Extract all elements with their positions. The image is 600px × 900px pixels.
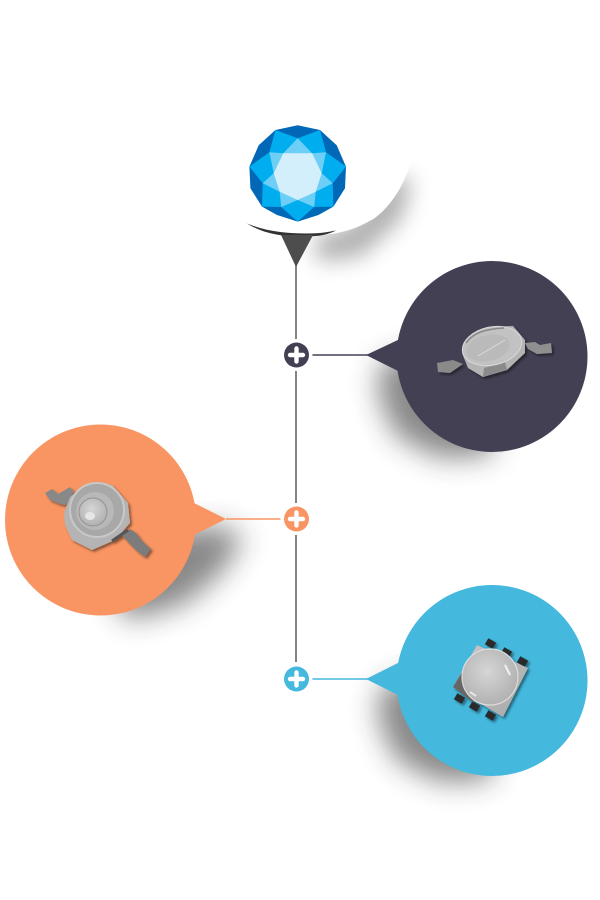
icon: blue gem [249, 125, 346, 222]
panel: orange callout [5, 424, 226, 616]
icon: plus, blue [280, 663, 312, 695]
panel: top white badge [247, 100, 414, 267]
icon: high power LED, dark panel [437, 321, 552, 377]
shadows [110, 175, 500, 782]
pointer: dark callout [366, 339, 400, 372]
pointer: blue callout [366, 662, 400, 696]
panel: dark callout [366, 261, 588, 452]
panel: blue callout [366, 585, 588, 776]
connector: blue [306, 678, 368, 680]
pointer: orange callout [192, 502, 226, 536]
icon: plus, orange [280, 503, 312, 535]
icon: high power LED, orange panel [45, 483, 151, 557]
connector: dark [306, 354, 368, 356]
pointer: top badge [281, 235, 313, 267]
icon: surface mount LED, blue panel [453, 638, 528, 721]
connector: orange [226, 518, 286, 520]
timeline spine [295, 262, 297, 662]
icon: plus, dark [280, 339, 312, 371]
